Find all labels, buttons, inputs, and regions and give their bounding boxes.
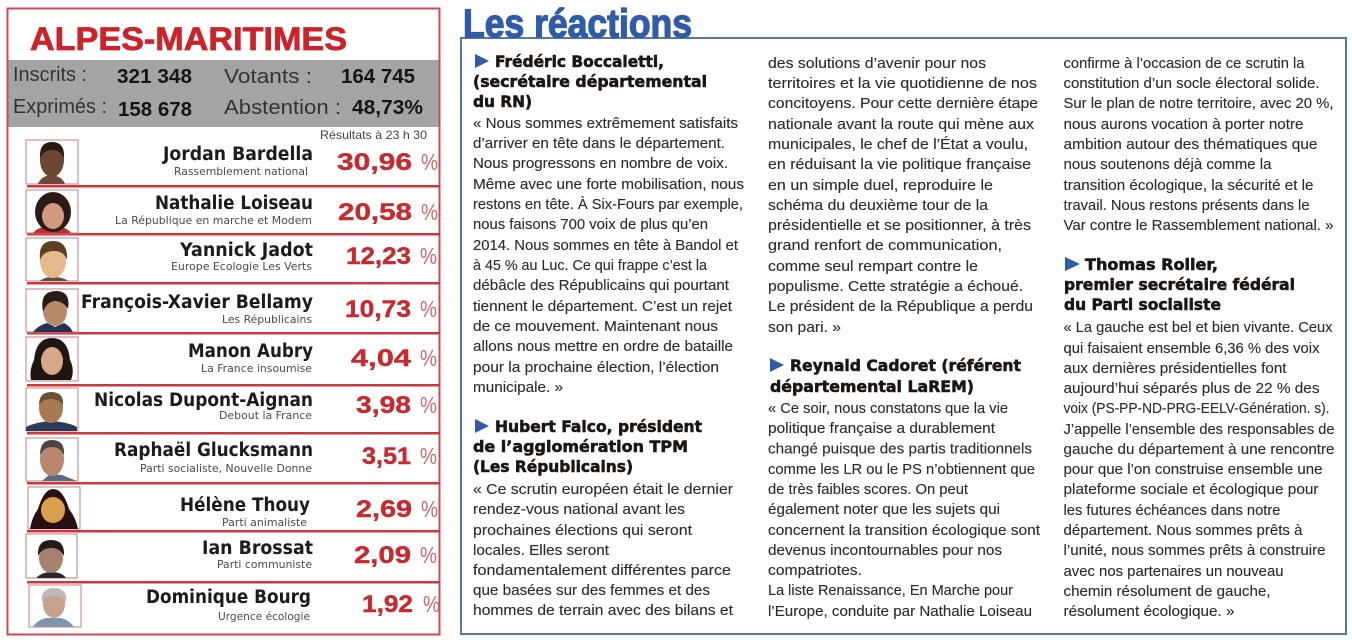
panel: Les réactions: [461, 2, 1346, 634]
row: Nathalie Loiseau: Nathalie Loiseau: [155, 193, 313, 214]
reaction: Hubert Falco continued: concitoyens. Pour cette dernière étape: [768, 96, 1038, 112]
reaction: Thomas Roller: voix (PS-PP-ND-PRG-EELV-Génération. s).: [1064, 401, 1330, 417]
row: Manon Aubry: [26, 337, 437, 381]
row: François-Xavier Bellamy: Les Républicains: [222, 313, 312, 326]
row: Ian Brossat: %: [420, 542, 437, 568]
row: François-Xavier Bellamy: %: [420, 296, 437, 322]
reaction: Reynald Cadoret: l’Europe, conduite par Nathalie Loiseau: [768, 604, 1032, 620]
reaction: Reynald Cadoret: devenus incontournables pour nos: [768, 543, 1002, 559]
reaction: Hubert Falco continued: Le président de la République a perdu: [768, 299, 1033, 315]
reaction: Frédéric Boccaletti: à 45 % au Luc. Ce qui frappe c’est la: [473, 258, 708, 274]
icon: portrait Yannick Jadot: [26, 238, 78, 281]
row: Dominique Bourg: 1,92: [362, 591, 413, 618]
panel: turnout statistics: [8, 60, 438, 127]
reaction: Frédéric Boccaletti: Frédéric Boccaletti,: [495, 52, 664, 71]
reaction: Hubert Falco continued: des solutions d’avenir pour nos: [768, 56, 986, 72]
reaction: Thomas Roller: avec nos partenaires un nouveau: [1064, 564, 1284, 580]
reaction: Thomas Roller: Thomas Roller,: [1085, 255, 1218, 274]
row: Hélène Thouy: [28, 487, 438, 529]
row: Raphaël Glucksmann: %: [420, 443, 437, 469]
reaction: Frédéric Boccaletti: nous faisons 700 voix de plus qu’en: [473, 217, 708, 233]
reaction: Reynald Cadoret: Sur le plan de notre territoire, avec 20 %,: [1064, 96, 1334, 112]
reaction: Frédéric Boccaletti: Nous progressons en nombre de voix.: [473, 156, 728, 172]
reaction: Hubert Falco: Hubert Falco, président: [495, 417, 702, 436]
icon: arrow marker: [475, 419, 489, 433]
row: Ian Brossat: 2,09: [354, 542, 411, 569]
row: Raphaël Glucksmann: Parti socialiste, Nouvelle Donne: [140, 462, 312, 475]
row: Yannick Jadot: Europe Ecologie Les Verts: [171, 260, 312, 273]
reaction: Reynald Cadoret: [768, 56, 1334, 620]
icon: portrait Manon Aubry: [26, 337, 78, 381]
reaction: Reynald Cadoret: politique française a durablement: [768, 421, 995, 437]
row: François-Xavier Bellamy: [26, 289, 437, 332]
row: Manon Aubry: 4,04: [351, 345, 412, 372]
row: Hélène Thouy: %: [421, 496, 438, 522]
reaction: Reynald Cadoret: Reynald Cadoret (référent: [790, 356, 1021, 375]
row: Nathalie Loiseau: [26, 190, 438, 233]
reaction: Thomas Roller: « La gauche est bel et bien vivante. Ceux: [1064, 320, 1333, 336]
icon: arrow marker: [475, 54, 489, 68]
reaction: Thomas Roller: résolument écologique. »: [1064, 604, 1234, 620]
reaction: Hubert Falco: prochaines élections qui seront: [473, 523, 692, 539]
reaction: Thomas Roller: département. Nous sommes prêts à: [1064, 523, 1303, 539]
row: Hélène Thouy: Parti animaliste: [222, 516, 307, 529]
row: Nicolas Dupont-Aignan: Debout la France: [219, 409, 312, 422]
reaction: Reynald Cadoret: compatriotes.: [768, 563, 862, 579]
heading: Les réactions: Les réactions: [463, 2, 692, 46]
reaction: Frédéric Boccaletti: [473, 52, 744, 396]
reaction: Thomas Roller: J’appelle l’ensemble des responsables de: [1064, 422, 1334, 438]
reaction: Frédéric Boccaletti: du RN): [473, 92, 532, 111]
row: Dominique Bourg: %: [423, 591, 440, 617]
reaction: Hubert Falco continued: son pari. »: [768, 320, 841, 336]
row: Manon Aubry: %: [420, 345, 437, 371]
row: Jordan Bardella: Rassemblement national: [174, 165, 308, 178]
row: Jordan Bardella: %: [421, 149, 438, 175]
reaction: Thomas Roller: l’unité, nous sommes prêts à construire: [1064, 543, 1326, 559]
panel: turnout statistics: 48,73%: [352, 97, 423, 119]
reaction: Hubert Falco continued: schéma du deuxième tour de la: [768, 198, 989, 214]
reaction: Reynald Cadoret: constitution d’un socle électoral solide.: [1064, 76, 1320, 92]
reaction: Hubert Falco continued: en un simple duel, reproduire le: [768, 178, 993, 194]
reaction: Hubert Falco: fondamentalement différentes parce: [473, 563, 731, 579]
panel: turnout statistics: Exprimés :: [13, 96, 107, 118]
icon: portrait Hélène Thouy: [28, 487, 80, 529]
reaction: Frédéric Boccaletti: tiennent le département. C’est un rejet: [473, 299, 732, 315]
panel: turnout statistics: 158 678: [118, 99, 192, 121]
reaction: Hubert Falco: « Ce scrutin européen était le dernier: [473, 482, 733, 498]
row: Raphaël Glucksmann: 3,51: [362, 443, 411, 470]
reaction: Hubert Falco: rendez-vous national avant les: [473, 502, 685, 518]
reaction: Frédéric Boccaletti: Même avec une forte mobilisation, nous: [473, 177, 744, 193]
reaction: Hubert Falco continued: populisme. Cette stratégie a échoué.: [768, 279, 1023, 295]
reaction: Hubert Falco: de l’agglomération TPM: [473, 437, 688, 456]
reaction: Frédéric Boccaletti: (secrétaire départemental: [473, 72, 707, 91]
reaction: Frédéric Boccaletti: débâcle des Républicains qui pourtant: [473, 278, 729, 294]
row: Dominique Bourg: Urgence écologie: [218, 610, 310, 623]
row: Ian Brossat: Ian Brossat: [202, 538, 313, 559]
reaction: Frédéric Boccaletti: restons en tête. À Six-Fours par exemple,: [473, 196, 743, 213]
reaction: Reynald Cadoret: Var contre le Rassemblement national. »: [1064, 218, 1334, 234]
row: Yannick Jadot: %: [420, 243, 437, 269]
reaction: Thomas Roller: premier secrétaire fédéral: [1064, 275, 1295, 294]
row: Ian Brossat: Parti communiste: [217, 558, 312, 571]
reaction: Hubert Falco continued: [768, 56, 1038, 336]
reaction: Thomas Roller: du Parti socialiste: [1064, 295, 1221, 314]
reaction: Reynald Cadoret: nous soutenons déjà comme la: [1064, 157, 1272, 173]
reaction: Hubert Falco: [473, 417, 733, 619]
reaction: Thomas Roller: qui faisaient ensemble 6,36 % des voix: [1064, 341, 1320, 357]
reaction: Hubert Falco continued: grand renfort de communication,: [768, 238, 1002, 254]
row: Manon Aubry: Manon Aubry: [188, 341, 313, 362]
reaction: Reynald Cadoret: concernent la transition écologique sont: [768, 523, 1040, 539]
icon: portrait Dominique Bourg: [29, 585, 81, 627]
reaction: Reynald Cadoret: comme les LR ou le PS n’obtiennent que: [768, 462, 1035, 478]
reaction: Hubert Falco: (Les Républicains): [473, 457, 633, 476]
reaction: Frédéric Boccaletti: municipale. »: [473, 380, 563, 396]
panel: Alpes-Maritimes results: [8, 8, 440, 634]
panel: turnout statistics: 164 745: [341, 66, 415, 88]
reaction: Reynald Cadoret: « Ce soir, nous constatons que la vie: [768, 401, 1008, 417]
results time note: Résultats à 23 h 30: [320, 128, 427, 142]
reaction: Reynald Cadoret: La liste Renaissance, En Marche pour: [768, 583, 1013, 599]
row: Yannick Jadot: 12,23: [346, 243, 411, 270]
row: Nathalie Loiseau: %: [421, 199, 438, 225]
reaction: Reynald Cadoret: ambition autour des thématiques que: [1064, 137, 1318, 153]
reaction: Thomas Roller: aujourd’hui séparés plus de 22 % des: [1064, 381, 1320, 397]
icon: portrait Nathalie Loiseau: [26, 190, 78, 233]
row: François-Xavier Bellamy: 10,73: [345, 296, 411, 323]
icon: portrait Raphaël Glucksmann: [26, 438, 78, 481]
row: Hélène Thouy: Hélène Thouy: [180, 495, 310, 516]
panel: turnout statistics: Inscrits :: [13, 64, 87, 86]
row: Nicolas Dupont-Aignan: [26, 388, 437, 431]
icon: portrait François-Xavier Bellamy: [26, 289, 78, 332]
row: Yannick Jadot: Yannick Jadot: [179, 240, 313, 261]
reaction: Reynald Cadoret: travail. Nous restons présents dans le: [1064, 198, 1310, 214]
reaction: Frédéric Boccaletti: d’arriver en tête dans le département.: [473, 136, 725, 152]
reaction: Thomas Roller: gauche du département à une rencontre: [1064, 442, 1334, 458]
row: Nicolas Dupont-Aignan: 3,98: [356, 392, 411, 419]
reaction: Reynald Cadoret: de très faibles scores. On peut: [768, 482, 968, 498]
row: Raphaël Glucksmann: Raphaël Glucksmann: [114, 440, 313, 461]
reaction: Hubert Falco continued: présidentielle et se positionner, à très: [768, 218, 1031, 234]
reaction: Hubert Falco: hommes de terrain avec des bilans et: [473, 603, 733, 619]
reaction: Hubert Falco: que basées sur des femmes et des: [473, 583, 710, 599]
icon: arrow marker: [1065, 257, 1080, 271]
reaction: Reynald Cadoret: confirme à l’occasion de ce scrutin la: [1064, 56, 1305, 72]
reaction: Reynald Cadoret: départemental LaREM): [770, 377, 974, 396]
reaction: Thomas Roller: les futures échéances dans notre: [1064, 503, 1280, 519]
reaction: Frédéric Boccaletti: de ce mouvement. Maintenant nous: [473, 319, 718, 335]
reaction: Thomas Roller: aux dernières présidentielles font: [1064, 361, 1286, 377]
reaction: Hubert Falco continued: comme seul rempart contre le: [768, 259, 978, 275]
row: Dominique Bourg: Dominique Bourg: [146, 587, 311, 608]
reaction: Reynald Cadoret: transition écologique, la sécurité et le: [1064, 178, 1314, 194]
row: Nicolas Dupont-Aignan: %: [420, 392, 437, 418]
panel: turnout statistics: 321 348: [117, 66, 192, 88]
row: Ian Brossat: [26, 534, 437, 578]
row: Nathalie Loiseau: La République en marche et Modem: [115, 214, 312, 227]
title: Alpes-Maritimes: ALPES-MARITIMES: [30, 21, 347, 57]
reaction: Hubert Falco continued: en réduisant la vie politique française: [768, 157, 1031, 173]
reaction: Frédéric Boccaletti: pour la prochaine élection, l’élection: [473, 360, 719, 376]
row: Raphaël Glucksmann: [26, 438, 437, 481]
reaction: Thomas Roller: chemin résolument de gauche,: [1064, 584, 1270, 600]
row: Jordan Bardella: 30,96: [337, 149, 412, 176]
row: Jordan Bardella: [26, 140, 438, 184]
reaction: Reynald Cadoret: changé puisque des partis traditionnels: [768, 442, 1032, 458]
icon: arrow marker: [770, 358, 784, 372]
row: Jordan Bardella: Jordan Bardella: [161, 144, 313, 165]
reaction: Thomas Roller: plateforme sociale et écologique pour: [1064, 482, 1319, 498]
reaction: Frédéric Boccaletti: « Nous sommes extrêmement satisfaits: [473, 116, 738, 132]
icon: portrait Jordan Bardella: [26, 140, 78, 184]
reaction: Frédéric Boccaletti: 2014. Nous sommes en tête à Bandol et: [473, 238, 738, 254]
reaction: Frédéric Boccaletti: allons nous mettre en ordre de bataille: [473, 339, 733, 355]
icon: portrait Ian Brossat: [26, 534, 77, 578]
icon: portrait Nicolas Dupont-Aignan: [26, 388, 78, 431]
reaction: Reynald Cadoret: également noter que les sujets qui: [768, 502, 1000, 518]
row: Manon Aubry: La France insoumise: [201, 362, 312, 375]
reaction: Hubert Falco continued: municipales, le chef de l’État a voulu,: [768, 136, 1028, 153]
row: François-Xavier Bellamy: François-Xavier Bellamy: [81, 292, 313, 313]
row: Dominique Bourg: [29, 585, 440, 627]
reaction: Hubert Falco continued: nationale avant la route qui mène aux: [768, 117, 1035, 133]
reaction: Thomas Roller: [1064, 255, 1334, 620]
reaction: Hubert Falco continued: territoires et la vie quotidienne de nos: [768, 76, 1037, 92]
row: Yannick Jadot: [26, 238, 437, 281]
row: Nicolas Dupont-Aignan: Nicolas Dupont-Aignan: [94, 390, 313, 411]
reaction: Hubert Falco: locales. Elles seront: [473, 543, 609, 559]
reaction: Reynald Cadoret: nous aurons vocation à porter notre: [1064, 117, 1304, 133]
row: Nathalie Loiseau: 20,58: [338, 199, 412, 226]
row: Hélène Thouy: 2,69: [356, 496, 412, 523]
reaction: Thomas Roller: pour que l’on construise ensemble une: [1064, 462, 1322, 478]
panel: turnout statistics: Abstention :: [224, 97, 341, 119]
panel: turnout statistics: Votants :: [224, 66, 312, 88]
